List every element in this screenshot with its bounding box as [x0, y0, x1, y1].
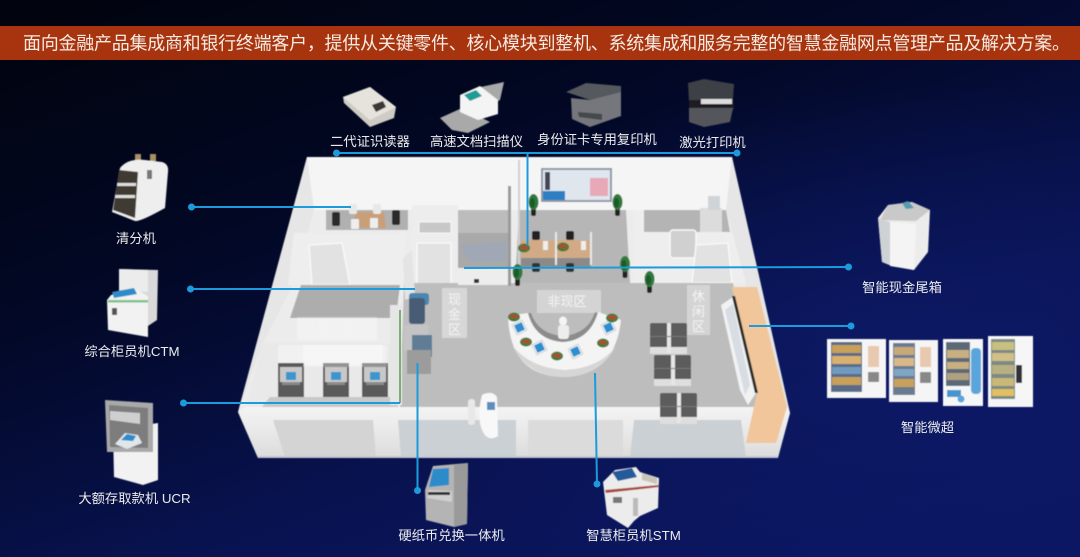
vending machine 4 — [988, 336, 1033, 407]
vending machine 3 — [943, 339, 983, 406]
label: 智能微超: 智能微超 — [901, 420, 954, 435]
label: 激光打印机: 激光打印机 — [679, 135, 746, 150]
cash room counter — [458, 160, 520, 286]
zone label: 24H自助 — [303, 345, 387, 367]
top-left room — [326, 204, 408, 230]
label: 大额存取款机 UCR: 大额存取款机 UCR — [78, 491, 191, 506]
label: 智慧柜员机STM: 智慧柜员机STM — [586, 528, 681, 543]
label: 清分机: 清分机 — [116, 231, 156, 246]
zone label: 休闲区: 区 — [692, 319, 705, 334]
icon: ID card reader — [343, 87, 396, 127]
label: 综合柜员机CTM: 综合柜员机CTM — [84, 344, 180, 359]
wall screen — [541, 168, 612, 202]
guide robot — [468, 393, 498, 438]
vending machine 1 — [827, 339, 886, 398]
green line: UCR installation wall — [399, 310, 401, 403]
zone label: 24H自助: 24H自助 — [308, 349, 358, 364]
label: 硬纸币兑换一体机: 硬纸币兑换一体机 — [398, 528, 505, 543]
zone label: 共用加钞间: 共用加钞间 — [303, 321, 369, 336]
zone label: 休闲区: 闲 — [692, 304, 705, 319]
icon: ID copier — [566, 83, 621, 127]
lounge benches — [650, 323, 697, 424]
icon group: smart vending machines — [827, 336, 1033, 407]
back service area floor — [515, 210, 630, 283]
zone label: 休闲区 — [687, 285, 710, 335]
floor plan: bank branch 3D cutaway — [238, 157, 790, 458]
icon: CTM teller machine — [107, 269, 158, 337]
zone label: 非现区 — [537, 290, 601, 313]
zone label: 非现区: 非现区 — [547, 294, 587, 309]
glass partitions and door walls — [288, 196, 746, 285]
zone label: 现金区 — [442, 288, 467, 338]
zone label: 休闲区: 休 — [692, 289, 705, 304]
icon: laser printer — [688, 79, 734, 127]
icon: coin and note exchange machine — [425, 463, 468, 527]
zone label: 现金区: 金 — [448, 307, 461, 322]
front glass wall — [238, 407, 790, 458]
label: 智能现金尾箱: 智能现金尾箱 — [862, 280, 942, 295]
zone label: 现金区: 区 — [448, 322, 461, 337]
icon: document scanner — [440, 82, 504, 133]
zone label: 共用加钞间 — [297, 317, 377, 340]
icon: banknote sorter — [112, 154, 168, 221]
zone label: 现金区: 现 — [448, 292, 461, 307]
leader lines — [180, 150, 854, 494]
reception desk — [508, 312, 621, 377]
icon: UCR cash machine — [105, 400, 158, 485]
bookshelf wall — [721, 287, 787, 443]
teller machines beside cash zone — [404, 293, 432, 374]
banner: 面向金融产品集成商和银行终端客户，提供从关键零件、核心模块到整机、系统集成和服务完整的智慧金融网点管理产品及解决方案。 — [23, 34, 1070, 54]
main hall floor — [400, 283, 760, 407]
banner — [0, 26, 1080, 60]
service desks — [518, 231, 592, 272]
potted plants — [512, 194, 654, 293]
icon: smart cash tail box — [878, 201, 930, 270]
icon: smart teller machine STM — [603, 467, 659, 528]
label: 高速文档扫描仪: 高速文档扫描仪 — [430, 133, 523, 149]
label: 身份证卡专用复印机: 身份证卡专用复印机 — [537, 132, 657, 147]
vending machine 2 — [889, 340, 938, 402]
label: 二代证识读器: 二代证识读器 — [330, 134, 410, 149]
left room and self-service zone — [246, 250, 415, 407]
